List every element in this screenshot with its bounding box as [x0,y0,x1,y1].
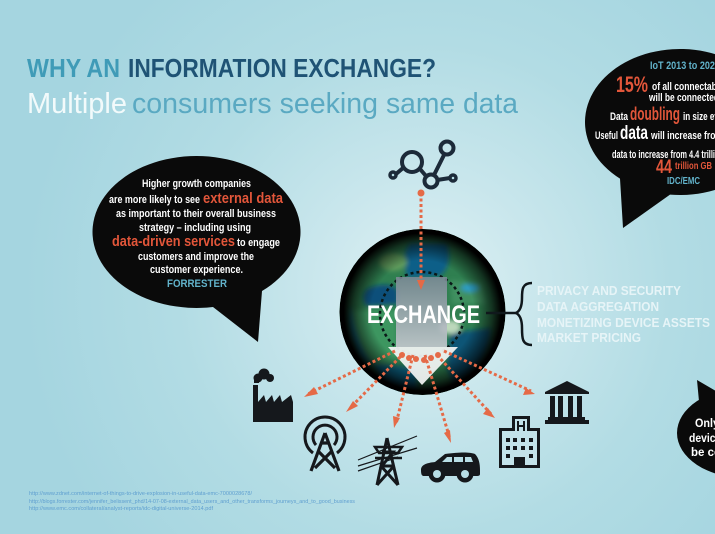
callout: IoT statistics: doubling [630,104,680,124]
down arrow [396,277,447,347]
source links: http://blogs.forrester.com/jennifer_belissent_phd/14-07-08-external_data_users_and_other_transforms_journeys_and_to_good_business [29,499,356,505]
title: INFORMATION EXCHANGE? [128,53,436,83]
globe [340,229,506,395]
dotted inner circle [380,272,464,356]
callout: IoT statistics: Data [610,111,629,123]
callout: Forrester quote: as important to their overall business [116,208,276,220]
source links [29,491,356,512]
subtitle: Multiple [27,88,127,120]
arrows: outward to sectors [308,351,531,439]
subtitle: consumers seeking [132,88,378,120]
callout: IoT statistics: data [620,123,648,144]
exchange label: EXCHANGE [367,301,480,329]
list: exchange functions: PRIVACY AND SECURITY [537,283,681,298]
icon: data network [390,142,456,188]
callout: IoT statistics: 15% [616,72,648,97]
arrow: from network to globe [417,190,425,290]
callout: IoT statistics: IDC/EMC [667,176,700,187]
subtitle [27,88,519,120]
callout: Forrester quote: customers and improve the [138,251,254,263]
callout: IoT statistics: 44 [656,157,672,178]
callout: Forrester quote: Higher growth companies [142,178,251,190]
icon: factory [253,368,293,422]
icon: radio tower [305,417,345,471]
callout: Forrester quote [93,156,301,342]
callout: Forrester quote: FORRESTER [167,278,227,290]
icon: hospital [499,416,540,468]
title [27,53,436,83]
bracket connector [486,283,532,345]
icon: bank [545,381,589,424]
callout: IoT statistics [585,49,715,228]
callout: Forrester quote: to engage [237,237,280,249]
list: exchange functions [537,283,710,345]
title: WHY AN [27,53,120,83]
subtitle: same data [386,88,519,120]
callout: Forrester quote: data-driven services [112,233,235,250]
icon: power pylon [358,436,417,485]
list: exchange functions: DATA AGGREGATION [537,299,659,314]
callout: Forrester quote: external data [203,190,284,207]
callout: Forrester quote: are more likely to see [109,194,200,206]
arrowheads [304,352,535,443]
callout: bottom right partial [677,380,715,478]
icon: car [421,452,480,482]
callout: Forrester quote: customer experience. [150,264,243,276]
list: exchange functions: MARKET PRICING [537,330,641,345]
callout: IoT statistics: Useful [595,130,618,142]
source links: http://www.zdnet.com/internet-of-things-to-drive-explosion-in-useful-data-emc-7000028678/ [29,491,253,497]
callout: Forrester quote: strategy – including using [139,222,251,234]
source links: http://www.emc.com/collateral/analyst-reports/idc-digital-universe-2014.pdf [29,506,214,512]
